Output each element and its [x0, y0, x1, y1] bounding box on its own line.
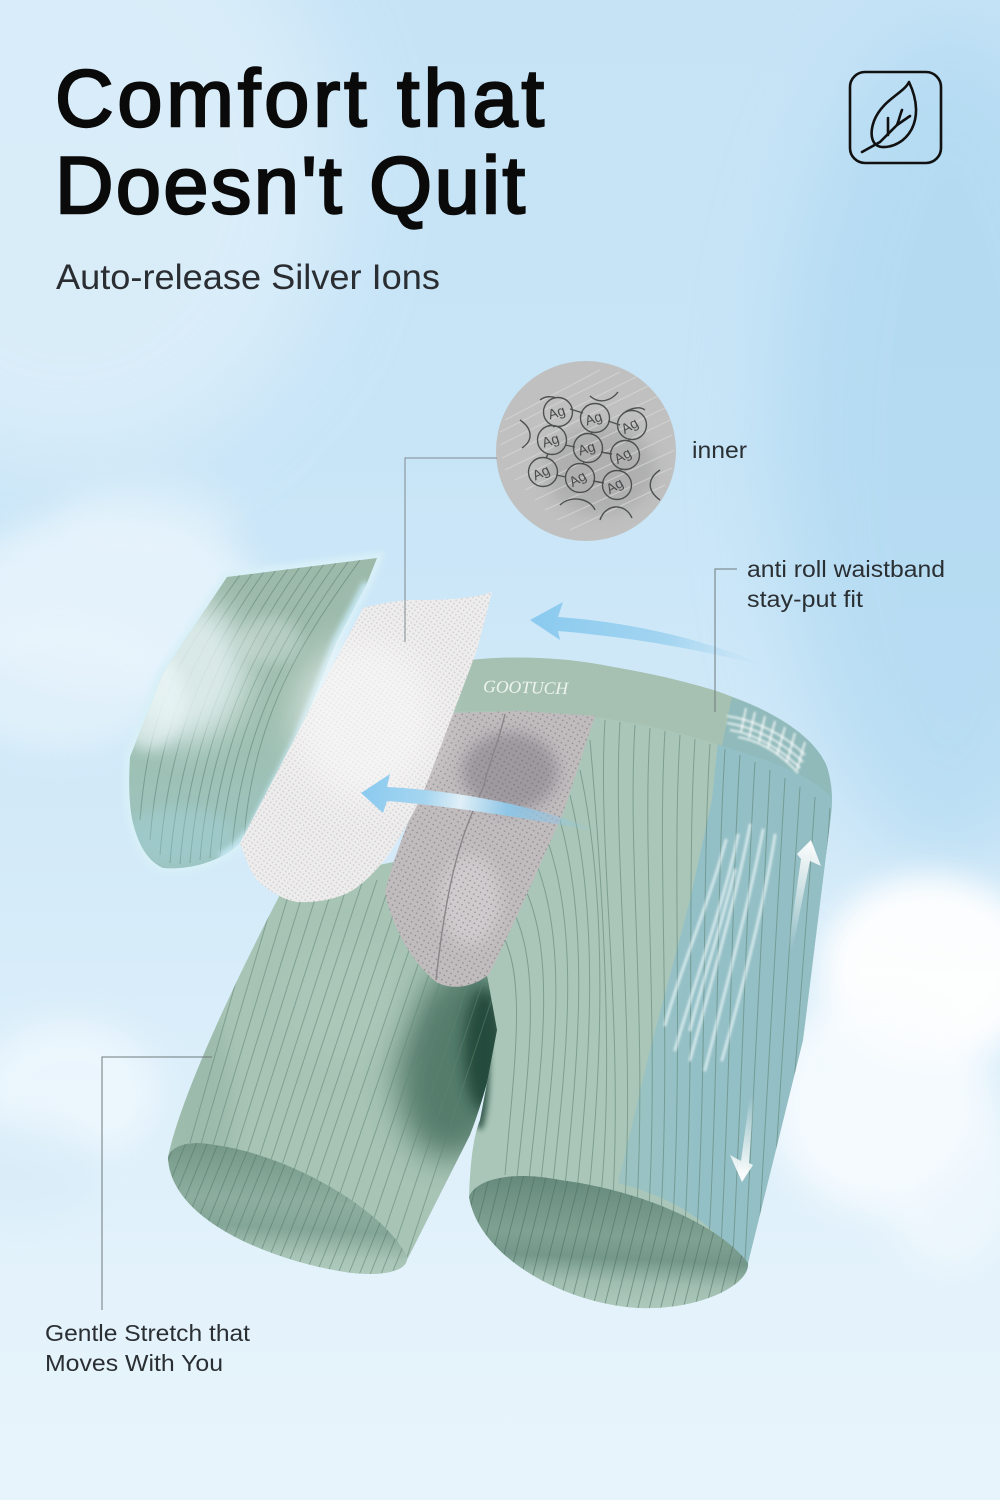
silver ion fabric swatch	[496, 361, 676, 541]
callout: inner: inner	[692, 437, 747, 463]
silver ion fabric swatch: Ag	[618, 414, 641, 437]
icon: leaf in rounded square	[850, 72, 941, 163]
right leg opening	[469, 1176, 748, 1308]
Ag molecule circles	[520, 392, 660, 520]
crotch shadow on right leg	[476, 1048, 494, 1133]
fan rib lines around crotch	[505, 940, 517, 1175]
callout: waistband: anti roll waistband	[747, 556, 945, 582]
white mesh lining panel	[240, 592, 492, 902]
detached outer fabric panel	[115, 558, 377, 868]
silver ion fabric swatch: Ag	[583, 408, 604, 428]
blue highlighted side panel	[618, 744, 832, 1270]
callout: waistband: stay-put fit	[747, 586, 864, 612]
left leg rib lines	[190, 880, 492, 1257]
title: Comfort that	[55, 54, 544, 144]
callout: gentle stretch: Gentle Stretch that	[45, 1320, 251, 1346]
silver ion fabric swatch: Ag	[530, 462, 552, 483]
waistband with logo	[450, 658, 831, 797]
silver ion fabric swatch: Ag	[576, 438, 597, 458]
waistband grid highlight	[727, 708, 805, 773]
silver ion fabric swatch: Ag	[603, 474, 626, 497]
silver ion fabric swatch: Ag	[546, 402, 567, 422]
stretch streaks	[665, 825, 775, 1070]
subtitle: Auto-release Silver Ions	[56, 258, 440, 297]
left leg opening	[168, 1143, 407, 1274]
callout: inner	[405, 437, 747, 642]
callout: waistband	[715, 556, 945, 712]
body rib lines	[505, 720, 830, 1300]
upper blue arrow	[530, 602, 770, 668]
silver ion fabric swatch: Ag	[611, 444, 634, 467]
gray inner pouch	[385, 711, 595, 987]
stretch arrow down	[730, 1095, 754, 1182]
silver ion fabric swatch: Ag	[566, 467, 589, 490]
stretch arrow up	[788, 840, 821, 952]
silver ion fabric swatch: Ag	[540, 430, 561, 450]
left leg of shorts	[168, 862, 497, 1274]
callout: gentle stretch	[45, 1057, 251, 1376]
right side of shorts body	[440, 658, 835, 1308]
callout: gentle stretch: Moves With You	[45, 1350, 223, 1376]
title: Doesn't Quit	[55, 141, 525, 231]
crotch shadow on left leg	[378, 968, 497, 1177]
logo: GOOTUCH	[483, 676, 570, 698]
title	[55, 54, 544, 231]
panel rib lines	[140, 560, 360, 864]
lower blue arrow	[361, 774, 602, 833]
panel fog	[123, 598, 247, 742]
